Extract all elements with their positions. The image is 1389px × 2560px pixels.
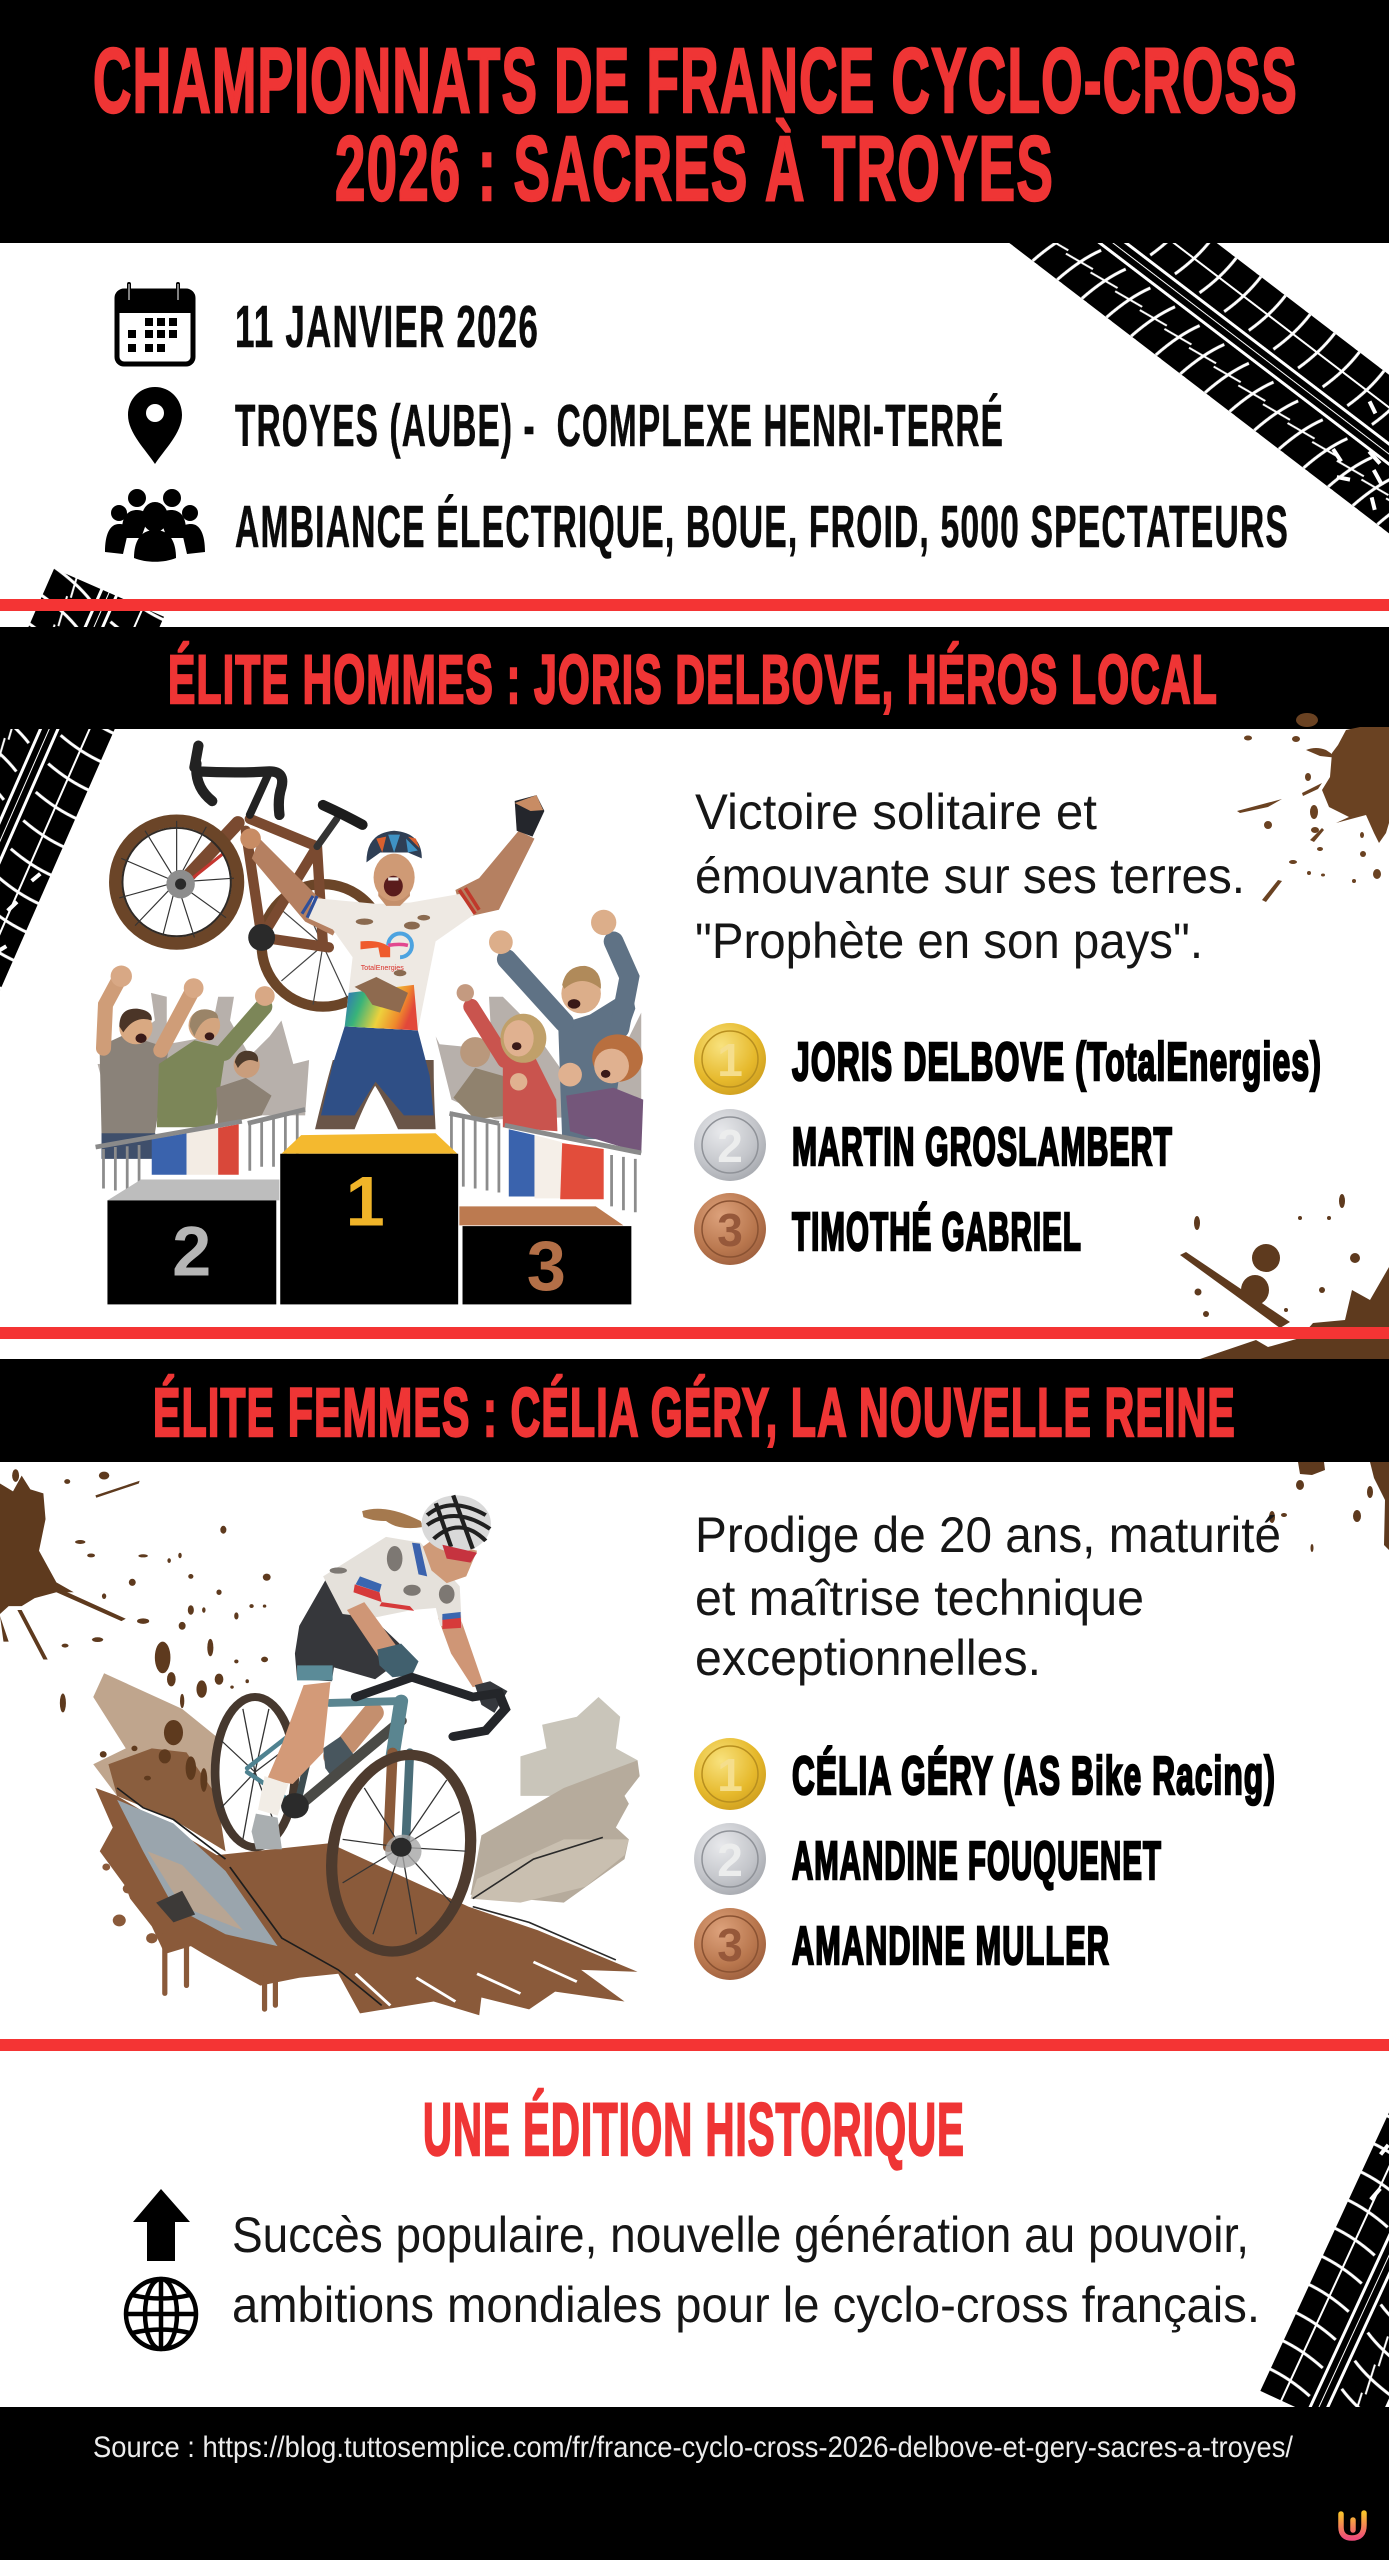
men's summary text: Victoire solitaire et: [695, 784, 1097, 840]
medal: gold: [694, 1023, 766, 1095]
front wheel: [318, 1747, 484, 1960]
podium: 3: [527, 1226, 566, 1305]
icon: location pin: [128, 387, 182, 464]
mud splat: left of women's section: [0, 1469, 271, 1712]
mud splat: upper right of men's section: [1237, 713, 1389, 902]
men's summary text: émouvante sur ses terres.: [695, 848, 1245, 904]
medal: bronze: 3: [717, 1204, 743, 1256]
barrier and flag left: [96, 1109, 305, 1191]
rock: [117, 1800, 278, 1946]
mud spray left: [93, 1673, 226, 1851]
illustration: Joris Delbove on the podium: [96, 746, 643, 1305]
medal: bronze: [694, 1908, 766, 1980]
icon: globe: [126, 2279, 196, 2349]
mud splat: upper right of women's section: [1269, 1462, 1389, 1552]
header band: [0, 0, 1389, 243]
podium: 2: [172, 1212, 211, 1291]
crowd left: [100, 966, 275, 1159]
distant grey trees and hill: [520, 1697, 638, 1796]
tyre track: left under first band: [0, 569, 164, 1020]
icon: crowd: [105, 489, 205, 562]
medal: silver: 2: [717, 1834, 743, 1886]
bike frame: [183, 746, 362, 947]
name: third place: TIMOTHÉ GABRIEL: [792, 1202, 1082, 1262]
winner cyclist: [240, 795, 544, 1129]
podium: [107, 1133, 631, 1305]
rider: [252, 1495, 507, 1849]
medal: silver: [694, 1823, 766, 1895]
barrier and flag right: [449, 1111, 641, 1212]
tyre track: top right: [995, 132, 1389, 621]
winner cyclist: TotalEnergies: [361, 964, 404, 972]
medal: gold: 1: [717, 1749, 743, 1801]
name: third place: AMANDINE MULLER: [792, 1916, 1110, 1976]
women's summary text: et maîtrise technique: [695, 1570, 1144, 1626]
men's summary text: [695, 784, 1245, 969]
medal: bronze: 3: [717, 1919, 743, 1971]
medal: gold: 1: [717, 1034, 743, 1086]
far leg and shoe: [334, 1713, 373, 1756]
logo mark: [1341, 2513, 1364, 2538]
crowd right: [453, 910, 643, 1153]
women's section band: [0, 1359, 1389, 1462]
men's section band: [0, 627, 1389, 729]
date text: 11 JANVIER 2026: [235, 294, 539, 360]
source line: Source : https://blog.tuttosemplice.com/fr/france-cyclo-cross-2026-delbove-et-gery-sacres-a-troyes/: [93, 2431, 1294, 2464]
women's summary text: [695, 1507, 1281, 1686]
background crowd silhouettes: [98, 993, 641, 1119]
closing text: [232, 2207, 1260, 2333]
podium: 1: [346, 1161, 385, 1240]
footer band: [0, 2407, 1389, 2560]
men's results list: [694, 1023, 1322, 1265]
medal: bronze: [694, 1193, 766, 1265]
illustration: Célia Géry riding through mud: [93, 1495, 640, 2015]
closing text: Succès populaire, nouvelle génération au pouvoir,: [232, 2207, 1249, 2263]
closing text: ambitions mondiales pour le cyclo-cross français.: [232, 2277, 1260, 2333]
frame: [247, 1693, 410, 1847]
front wheel of bike: [115, 821, 238, 943]
icon: up arrow: [133, 2189, 190, 2261]
medal: silver: [694, 1109, 766, 1181]
title: [93, 30, 1298, 220]
women's summary text: exceptionnelles.: [695, 1630, 1041, 1686]
icon: calendar: [117, 284, 193, 364]
women's summary text: Prodige de 20 ans, maturité: [695, 1507, 1281, 1563]
mud ground: [95, 1788, 638, 2015]
tyre track: bottom right: [1260, 2082, 1389, 2441]
medal: silver: 2: [717, 1120, 743, 1172]
handlebar: [356, 1677, 505, 1737]
rear wheel: [215, 1697, 295, 1847]
mud splat: lower right of men's section: [1180, 1194, 1389, 1359]
red divider lines: [0, 599, 1389, 2051]
men's summary text: "Prophète en son pays".: [695, 913, 1203, 969]
rear wheel of bike: [262, 884, 384, 1007]
medal: gold: [694, 1738, 766, 1810]
women's results list: [694, 1738, 1276, 1980]
